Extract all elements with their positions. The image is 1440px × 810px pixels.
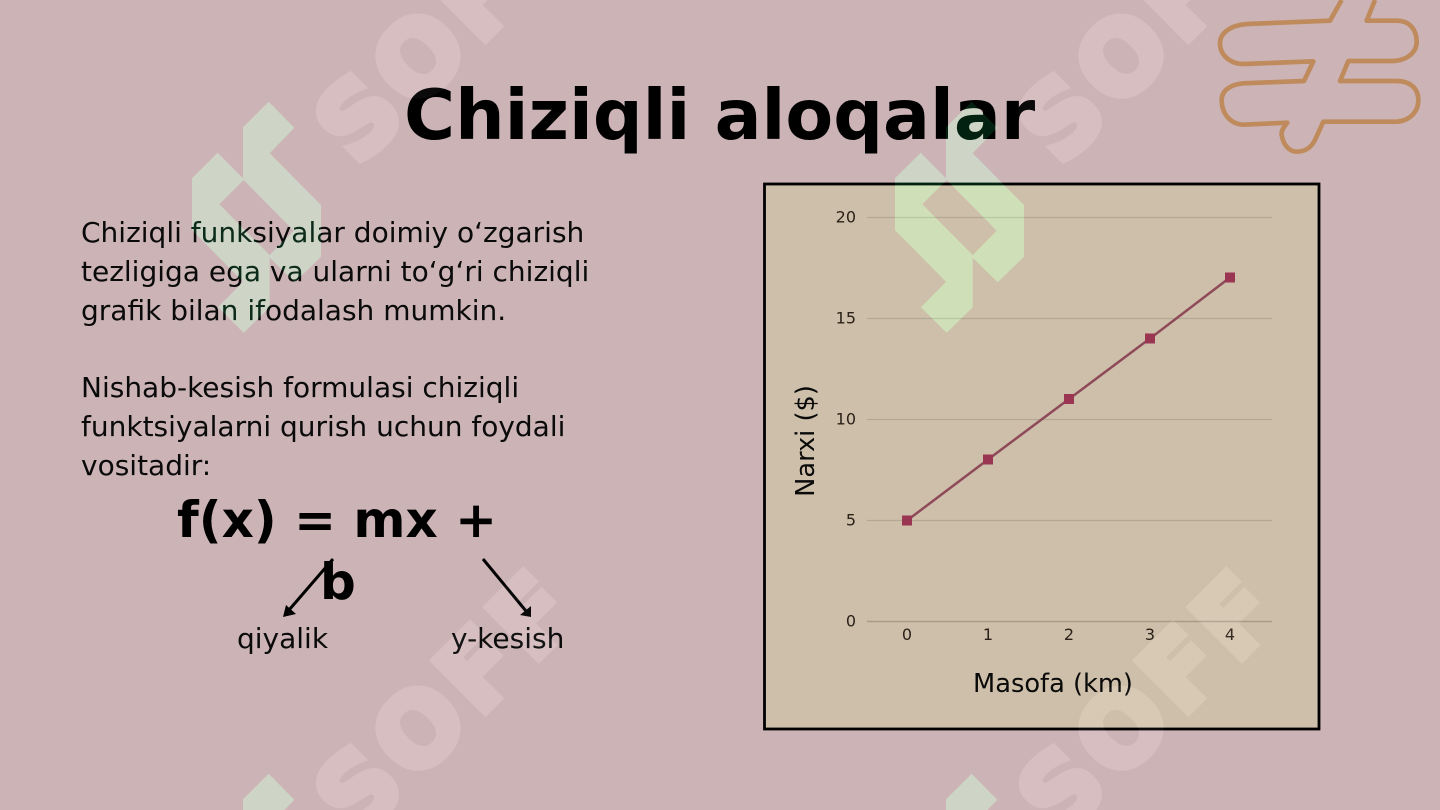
x-axis tick labels: 1 [983, 625, 993, 644]
x-axis tick labels: 3 [1145, 625, 1155, 644]
data series [902, 272, 1235, 526]
x-axis title: Masofa (km) [973, 669, 1133, 699]
text block: slope-intercept description: vositadir: [81, 448, 211, 482]
arrow: to y-intercept [482, 558, 531, 617]
text block: linear function description [81, 216, 589, 326]
x-axis tick labels: 0 [902, 625, 912, 644]
icon: decorative squiggle outline [1218, 0, 1421, 154]
chart panel [764, 184, 1319, 729]
formula: b [320, 553, 356, 611]
text block: linear function description: grafik bilan ifodalash mumkin. [81, 294, 506, 326]
y-axis tick labels [836, 208, 856, 630]
y-axis tick labels: 15 [836, 308, 856, 328]
arrow: to slope [283, 558, 334, 617]
y-axis title: Narxi ($) [791, 385, 821, 497]
text block: slope-intercept description [81, 370, 565, 482]
x-axis tick labels: 4 [1225, 625, 1235, 644]
x-axis tick labels [902, 625, 1235, 644]
x-axis tick labels: 2 [1064, 625, 1074, 644]
label: y-intercept: y-kesish [451, 622, 564, 655]
formula [177, 491, 497, 611]
y-axis tick labels: 0 [846, 612, 856, 630]
text block: linear function description: tezligiga ega va ularni to‘g‘ri chiziqli [81, 254, 589, 288]
y-axis tick labels: 20 [836, 208, 856, 226]
y-axis tick labels: 5 [846, 510, 856, 530]
text block: slope-intercept description: funktsiyalarni qurish uchun foydali [81, 410, 565, 442]
y-axis tick labels: 10 [836, 410, 856, 428]
formula: f(x) = mx + [177, 491, 497, 549]
label: slope: qiyalik [237, 622, 328, 655]
text block: slope-intercept description: Nishab-kesish formulasi chiziqli [81, 370, 519, 404]
title: Chiziqli aloqalar [404, 75, 1035, 156]
text block: linear function description: Chiziqli funksiyalar doimiy o‘zgarish [81, 216, 584, 248]
